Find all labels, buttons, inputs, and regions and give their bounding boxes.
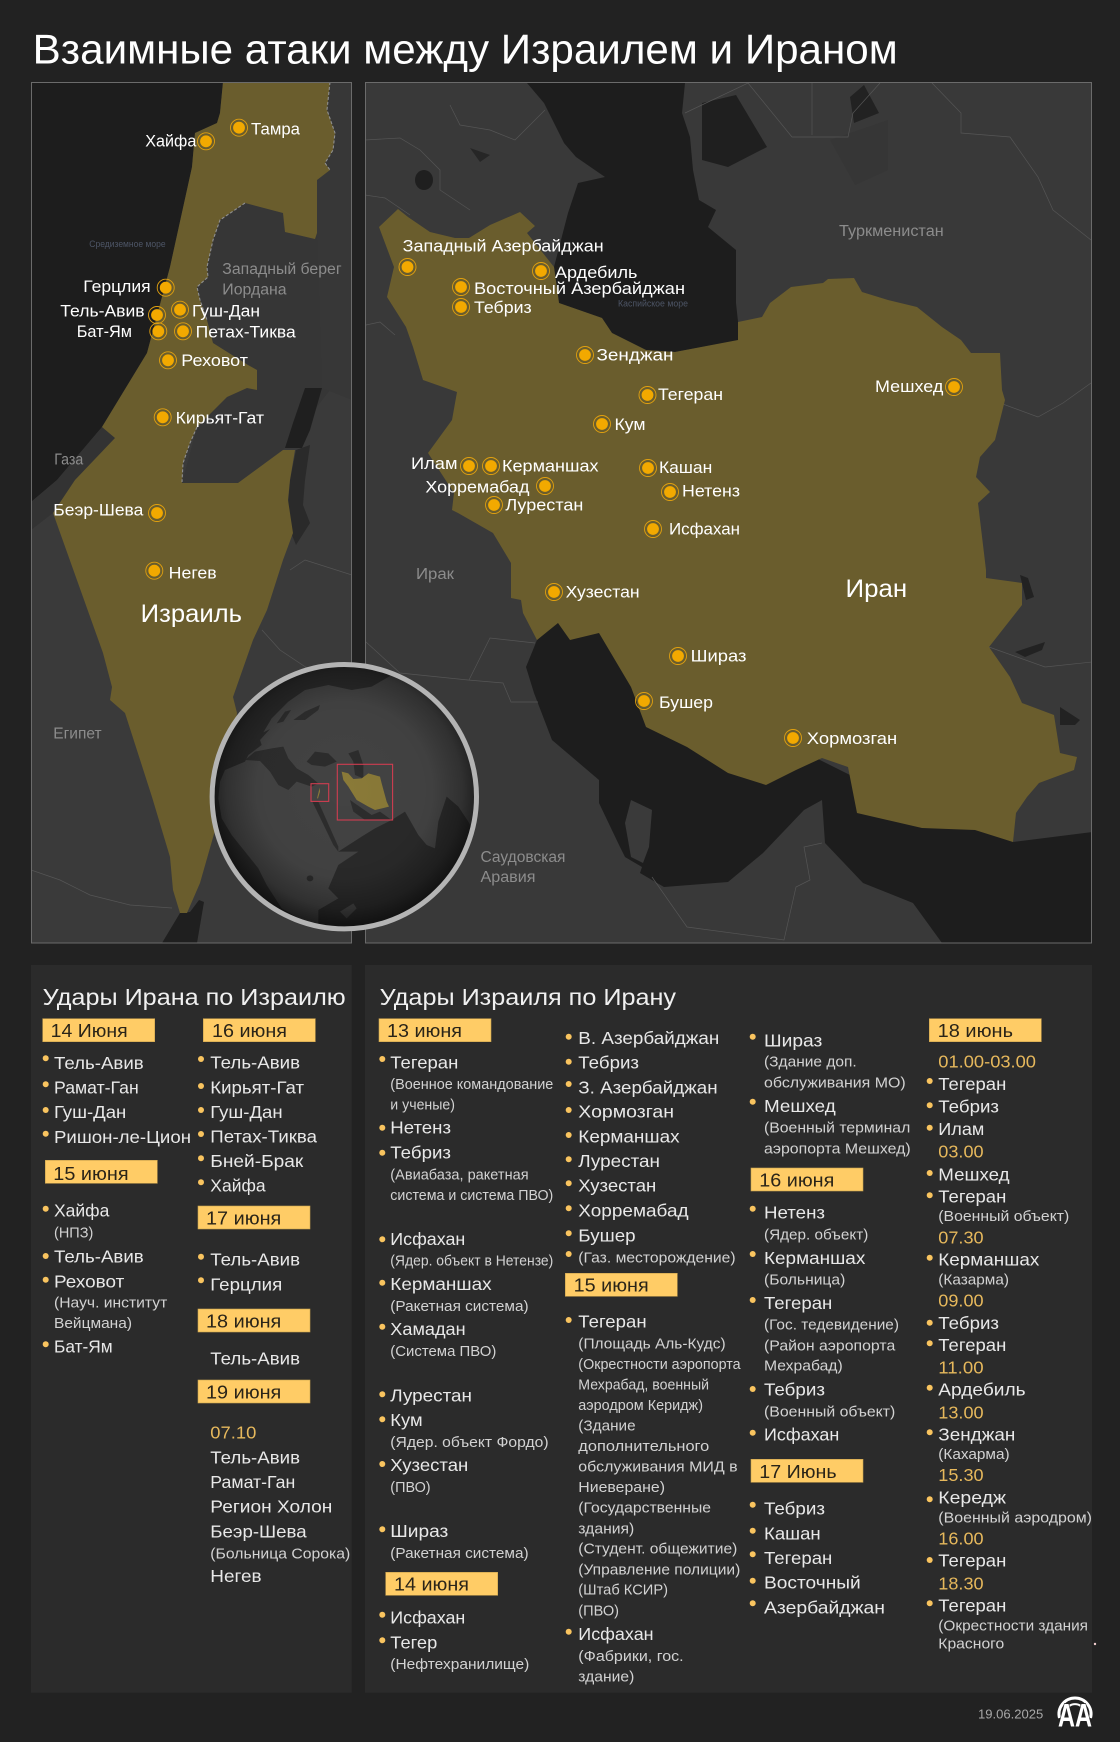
list: 18 June timeline: Кередж [938,1488,1006,1508]
Israel territory [53,82,335,913]
list: 18 June timeline: (Окрестности здания [938,1618,1088,1634]
list: 15 June: 15 июня [53,1164,129,1184]
marker: Нетенз: Нетенз [682,482,740,501]
list: 19 June: (Больница Сорока) [210,1546,350,1562]
list: 15 June: (Фабрики, гос. [578,1649,684,1665]
list: 19 June: Беэр-Шева [210,1521,307,1541]
list: 18 June timeline [927,1019,1092,1652]
label: West Bank: Западный берег [222,261,342,278]
list: 15 June [43,1160,168,1357]
list: 14 June: (Нефтехранилище) [390,1657,529,1673]
label: West Bank: Иордана [222,281,287,298]
list: 14 June [43,1019,191,1147]
list: 13 June: Исфахан [390,1229,465,1249]
list: 13 June: (Система ПВО) [390,1344,496,1360]
marker: Герцлия: Герцлия [83,277,151,296]
list: 16 June [198,1019,317,1196]
marker: Тель-Авив: Тель-Авив [60,302,145,321]
label: Saudi Arabia: Саудовская [480,849,566,866]
marker: Тебриз [452,298,532,317]
marker: Бат-Ям [77,322,167,341]
marker: Западный Азербайджан: Западный Азербайджан [403,237,604,256]
list: 13 June [379,1019,553,1562]
list: 18 June: Тель-Авив [210,1349,300,1369]
list: 18 June timeline: Керманшах [938,1250,1040,1270]
marker: Лурестан: Лурестан [505,496,583,515]
list: 19 June: 07.10 [210,1422,257,1442]
list: 15 June: аэродром Керидж) [578,1398,703,1414]
list: 18 June timeline: 15.30 [938,1465,984,1485]
marker: Западный Азербайджан [399,237,604,276]
marker: Тегеран: Тегеран [658,385,723,404]
label: Israel: Израиль [141,600,242,628]
list: 17 June [750,1459,885,1617]
list: 17 June: 17 июня [206,1209,281,1229]
marker: Кум [594,415,646,434]
list: 16 June: Тегеран [764,1293,832,1313]
label: Saudi Arabia [480,849,566,886]
list: 17 June: Тель-Авив [210,1250,300,1270]
list: 18 June timeline: 16.00 [938,1528,984,1548]
label: Iraq: Ирак [416,566,454,583]
list: 13 June: Шираз [390,1521,448,1541]
list: 18 June timeline: Ардебиль [938,1380,1026,1400]
list: 18 June timeline: 03.00 [938,1141,984,1161]
marker: Беэр-Шева [54,504,166,522]
list: 17 June: Кашан [764,1523,821,1543]
list: 15 June: Исфахан [578,1624,654,1644]
sea label: Caspian: Каспийское море [618,299,688,310]
list: 15 June: (Площадь Аль-Кудс) [578,1336,726,1352]
marker: Ардебиль: Ардебиль [555,263,638,282]
list: 15 June: Мехрабад, военный [578,1378,709,1394]
list: 13 June: (Ракетная система) [390,1546,529,1562]
list: 18 June timeline: Красного [938,1636,1004,1652]
list: 15 June continued: Мешхед [764,1096,836,1116]
list: 16 June: 16 июня [212,1021,287,1041]
list: 15 June: Вейцмана) [54,1316,132,1332]
list: 15 June [565,1273,742,1685]
list: 15 June: Бат-Ям [54,1337,113,1357]
list: 15 June: дополнительного [578,1439,709,1455]
list: 18 June timeline: 11.00 [938,1357,984,1377]
list: 15 June: обслуживания МИД в [578,1460,738,1476]
list: 13 June: Лурестан [390,1385,472,1405]
list: 15 June: здание) [578,1669,634,1685]
label: Iran: Иран [846,575,907,603]
list: 18 June timeline: 09.00 [938,1290,984,1310]
list: 15 June: (Студент. общежитие) [578,1542,737,1558]
list: 14 June continued: Керманшах [578,1126,680,1146]
panel: Iran strikes on Israel [31,965,352,1693]
list: 15 June: Ниеверане) [578,1480,665,1496]
list: 16 June: Тель-Авив [210,1053,300,1073]
marker: Петах-Тиква: Петах-Тиква [196,323,296,342]
marker: Негев: Негев [169,563,217,582]
list: 14 June continued: Тебриз [578,1052,639,1072]
list: 14 June [379,1572,529,1673]
list: 18 June timeline: Мешхед [938,1164,1010,1184]
list: 17 June: Герцлия [210,1274,282,1294]
list: 13 June: Кум [390,1410,423,1430]
locator box: Israel [311,784,329,801]
list: 13 June: и ученые) [390,1098,455,1114]
list: 14 June: Ришон-ле-Цион [54,1127,191,1147]
list: 16 June: (Район аэропорта [764,1338,896,1354]
marker: Хорремабад: Хорремабад [425,478,529,497]
list: 17 June: Восточный [764,1573,861,1593]
list: 16 June: Исфахан [764,1424,839,1444]
marker: Кум: Кум [614,415,646,434]
list: 18 June timeline: 13.00 [938,1402,984,1422]
list: 15 June continued: (Здание доп. [764,1055,857,1071]
marker: Мешхед: Мешхед [875,377,943,396]
marker: Бушер [636,692,713,712]
list: 19 June: Рамат-Ган [210,1472,295,1492]
list: 19 June: Тель-Авив [210,1447,300,1467]
list: 15 June: (ПВО) [578,1603,619,1619]
list: 16 June: Мехрабад) [764,1359,843,1375]
list: 18 June [198,1309,310,1369]
marker: Восточный Азербайджан: Восточный Азербайджан [474,279,685,298]
list: 13 June: (Ракетная система) [390,1299,529,1315]
marker: Тебриз: Тебриз [474,298,532,317]
marker: Шираз [670,647,747,666]
marker: Кирьят-Гат: Кирьят-Гат [176,408,264,427]
list: 13 June: (ПВО) [390,1480,431,1496]
globe: Israel highlight [317,788,320,798]
list: 16 June: 16 июня [759,1171,834,1191]
list: 18 June timeline: Тегеран [938,1596,1006,1616]
locator globe [205,655,485,942]
list: 14 June continued: Лурестан [578,1151,660,1171]
list: 15 June: Тегеран [578,1311,647,1331]
list: 13 June: (Авиабаза, ракетная [390,1167,529,1183]
list: 13 June: Тебриз [390,1142,451,1162]
icon: agency logo: AA [1058,1698,1092,1734]
marker: Хормозган: Хормозган [807,729,897,748]
list: 18 June timeline: (Военный объект) [938,1209,1069,1225]
list: 16 June: Керманшах [764,1248,866,1268]
sea label: Mediterranean: Средиземное море [89,239,166,250]
marker: Реховот: Реховот [181,351,248,370]
marker: Илам [412,457,478,475]
list: 13 June: 13 июня [387,1021,462,1041]
heading: Iran strikes: Удары Ирана по Израилю [43,984,346,1010]
list: 18 June timeline: (Кахарма) [938,1447,1010,1463]
marker: Кашан: Кашан [659,458,712,477]
list: 14 June continued: Хормозган [578,1102,674,1122]
marker: Шираз: Шираз [691,647,747,666]
marker: Хузестан: Хузестан [566,583,640,602]
list: 16 June: Кирьят-Гат [210,1077,304,1097]
marker: Негев [146,562,217,582]
list: 15 June: (Государственные [578,1501,711,1517]
list: 16 June: Бней-Брак [210,1151,304,1171]
list: 16 June [750,1168,899,1444]
list: 16 June: Хайфа [210,1176,266,1196]
list: 19 June: Регион Холон [210,1496,332,1516]
list: 17 June: Азербайджан [764,1597,885,1617]
list: 15 June: (Науч. институт [54,1296,168,1312]
list: 13 June: (Ядер. объект в Нетензе) [390,1254,553,1270]
list: 18 June timeline: 07.30 [938,1227,984,1247]
list: 18 June: 18 июня [206,1311,281,1331]
marker: Тель-Авив [60,305,166,324]
list: 14 June continued: Хорремабад [578,1201,689,1221]
list: 13 June: Керманшах [390,1274,492,1294]
list: 16 June: Тебриз [764,1379,825,1399]
list: 19 June [198,1380,350,1586]
list: 15 June: (Штаб КСИР) [578,1583,668,1599]
panel: Israel map [31,82,352,943]
list: 18 June timeline: Тегеран [938,1335,1006,1355]
marker: Керманшах: Керманшах [502,457,599,476]
panel: Iran map [365,82,1092,943]
list: 15 June: здания) [578,1521,634,1537]
list: 13 June: (Ядер. объект Фордо) [390,1435,549,1451]
list: 18 June timeline: 18 июнь [938,1021,1013,1041]
list: 18 June timeline: Тебриз [938,1097,999,1117]
list: 18 June timeline: Зенджан [938,1425,1015,1445]
list: 17 June [198,1206,310,1294]
list: 15 June: Хайфа [54,1201,110,1221]
marker: Бат-Ям: Бат-Ям [77,322,132,341]
list: 18 June timeline: Илам [938,1119,984,1139]
list: 15 June continued: Шираз [764,1030,822,1050]
marker: Бушер: Бушер [659,693,713,712]
list: 13 June: Нетенз [390,1117,451,1137]
footer date: 19.06.2025 [978,1707,1043,1722]
list: 14 June: Исфахан [390,1607,465,1627]
list: 13 June: Хамадан [390,1319,466,1339]
list: 18 June timeline: Тебриз [938,1313,999,1333]
list: 14 June: 14 Июня [51,1021,128,1041]
list: 14 June: Тель-Авив [54,1053,144,1073]
list: 14 June continued: (Газ. месторождение) [578,1250,736,1266]
heading: Israel strikes: Удары Израиля по Ирану [380,984,677,1010]
label: Gaza: Газа [54,451,84,468]
globe: Iran highlight [342,772,389,810]
marker: Гуш-Дан: Гуш-Дан [192,302,260,321]
label: Saudi Arabia: Аравия [480,869,536,886]
list: 18 June timeline: (Казарма) [938,1272,1009,1288]
list: 14 June continued: В. Азербайджан [578,1028,719,1048]
list: 17 June: 17 Июнь [759,1462,837,1482]
list: 16 June: (Военный объект) [764,1404,895,1420]
label: Turkmenistan: Туркменистан [839,223,944,240]
list: 17 June: Тебриз [764,1498,825,1518]
list: 16 June: Петах-Тиква [210,1126,317,1146]
marker: Тамра: Тамра [251,119,301,138]
list: 19 June: 19 июня [206,1382,281,1402]
list: 18 June timeline: Тегеран [938,1551,1006,1571]
list: 16 June: Нетенз [764,1203,825,1223]
list: 14 June: Тегер [390,1632,437,1652]
list: 14 June: Гуш-Дан [54,1102,126,1122]
marker: Илам: Илам [411,454,458,473]
list: 16 June: (Ядер. объект) [764,1227,868,1243]
marker: Хайфа: Хайфа [145,131,197,150]
list: 18 June timeline: Тегеран [938,1074,1006,1094]
panel: Israel strikes on Iran [365,965,1092,1693]
Iran territory [379,209,1077,842]
locator box: Iran [337,764,393,820]
list: 15 June continued: обслуживания МО) [764,1075,906,1091]
list: 15 June: (Здание [578,1418,636,1434]
marker: Зенджан: Зенджан [596,346,674,365]
list: 16 June: (Больница) [764,1273,845,1289]
marker: Беэр-Шева: Беэр-Шева [53,500,144,519]
list: 13 June: (Военное командование [390,1077,553,1093]
list: 13 June: система и система ПВО) [390,1188,553,1204]
list: 18 June timeline: Тегеран [938,1186,1006,1206]
list: 14 June continued: Бушер [578,1225,636,1245]
list: 15 June continued [750,1030,911,1157]
list: 16 June: Гуш-Дан [210,1102,283,1122]
list: 15 June: (НПЗ) [54,1225,93,1241]
list: 19 June: Негев [210,1566,262,1586]
list: 15 June: Тель-Авив [54,1246,144,1266]
list: 15 June: (Управление полиции) [578,1562,740,1578]
list: 14 June continued: З. Азербайджан [578,1077,718,1097]
list: 14 June: Рамат-Ган [54,1077,139,1097]
list: 17 June: Тегеран [764,1548,832,1568]
list: 18 June timeline: (Военный аэродром) [938,1510,1092,1526]
title: Взаимные атаки между Израилем и Ираном [33,25,898,72]
list: 15 June continued: (Военный терминал [764,1121,910,1137]
list: 15 June: Реховот [54,1271,124,1291]
list: 16 June: (Гос. тедевидение) [764,1318,899,1334]
list: 13 June: Хузестан [390,1455,468,1475]
label: Egypt: Египет [53,725,102,742]
label: West Bank [222,261,342,298]
list: 15 June: (Окрестности аэропорта [578,1357,742,1373]
list: 13 June: Тегеран [390,1053,458,1073]
globe frame [212,664,477,929]
list: 15 June: 15 июня [574,1276,649,1296]
list: 14 June continued: Хузестан [578,1176,656,1196]
list: 18 June timeline: 01.00-03.00 [938,1052,1036,1072]
list: 14 June continued [566,1028,736,1266]
list: 15 June continued: аэропорта Мешхед) [764,1141,911,1157]
list: 18 June timeline: 18.30 [938,1573,984,1593]
list: 14 June: 14 июня [394,1575,469,1595]
marker: Исфахан: Исфахан [669,519,740,538]
